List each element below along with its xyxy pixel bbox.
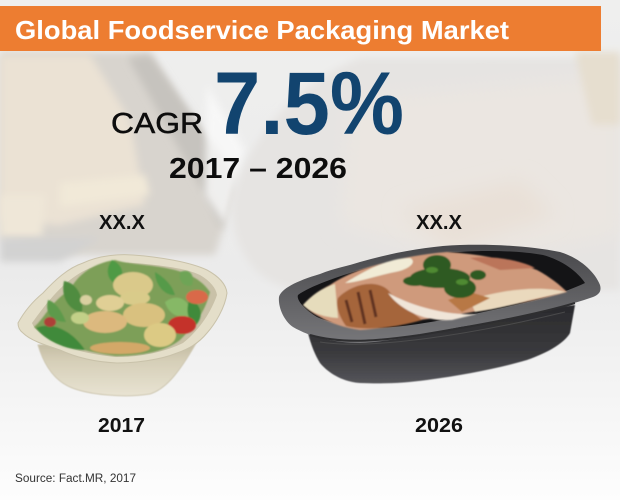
- 2017 label: 2017: [98, 415, 145, 437]
- CAGR value: 7.5%: [214, 53, 404, 153]
- chicken and pasta: [303, 252, 567, 330]
- period: 2017 – 2026: [169, 153, 347, 185]
- 2017 value: XX.X: [99, 212, 146, 234]
- CAGR figure: [111, 53, 404, 185]
- title text: Global Foodservice Packaging Market: [15, 15, 509, 45]
- icon: grilled chicken in black tray: [279, 245, 601, 383]
- parsley garnish: [403, 255, 486, 298]
- title banner: [0, 6, 601, 51]
- icon: salad in fibre bowl: [18, 255, 227, 396]
- source note: Source: Fact.MR, 2017: [15, 473, 136, 485]
- CAGR label: CAGR: [111, 108, 203, 140]
- 2026 value: XX.X: [416, 212, 463, 234]
- 2026 label: 2026: [415, 415, 463, 437]
- salad leaves: [34, 260, 210, 356]
